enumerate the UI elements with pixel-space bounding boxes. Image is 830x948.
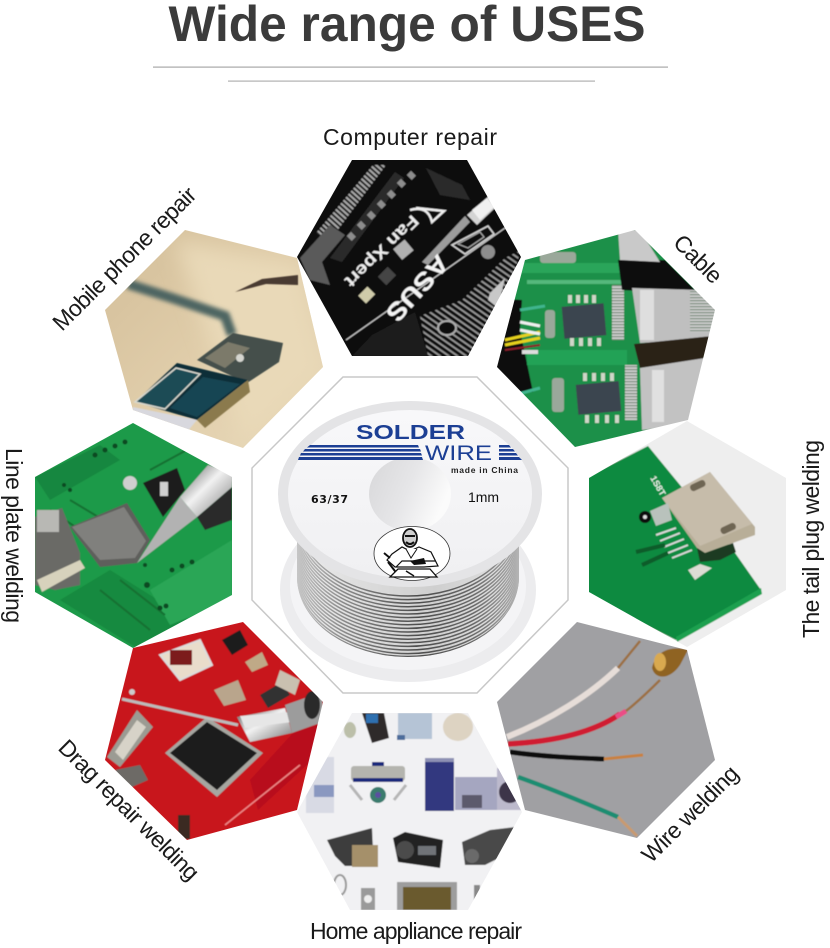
panel: computer repair photo: Fan Xpert <box>341 211 422 291</box>
brand: wire: WIRE <box>425 442 492 465</box>
panel: computer repair photo: ASUS <box>380 249 454 327</box>
panel: drag repair photo <box>100 618 328 844</box>
label: home appliance repair: Home appliance repair <box>310 918 522 944</box>
label: the tail plug welding: The tail plug welding <box>798 440 824 638</box>
panel: line plate photo <box>30 418 238 653</box>
panel: tail plug photo: 1S8T <box>648 474 668 498</box>
spool: wire coil <box>297 542 519 657</box>
brand: blue stripes <box>298 445 522 460</box>
text: alloy ratio: 63/37 <box>311 493 348 506</box>
label: line plate welding: Line plate welding <box>1 448 27 623</box>
panel: wire welding photo <box>497 622 715 838</box>
panel: mobile phone photo <box>100 225 328 453</box>
panel: centre octagon <box>252 377 568 693</box>
label: computer repair: Computer repair <box>323 124 497 150</box>
text: made in china: made in China <box>451 465 518 475</box>
label: drag repair welding: Drag repair welding <box>53 734 205 885</box>
label: cable: Cable <box>668 229 728 289</box>
label: mobile phone repair: Mobile phone repair <box>47 181 202 336</box>
spool: centre hole <box>369 457 451 531</box>
label: wire welding: Wire welding <box>636 760 744 868</box>
panel: tail plug photo <box>585 418 790 650</box>
text: diameter: 1mm <box>468 489 499 505</box>
spool: top flange <box>278 401 542 587</box>
spool: bottom flange <box>280 498 536 682</box>
brand: solder: SOLDER <box>356 422 466 444</box>
panel: home appliance photo <box>297 713 522 910</box>
panel: computer repair photo <box>297 160 521 356</box>
panel: cable photo <box>497 230 715 447</box>
icon: welder logo <box>374 526 450 580</box>
